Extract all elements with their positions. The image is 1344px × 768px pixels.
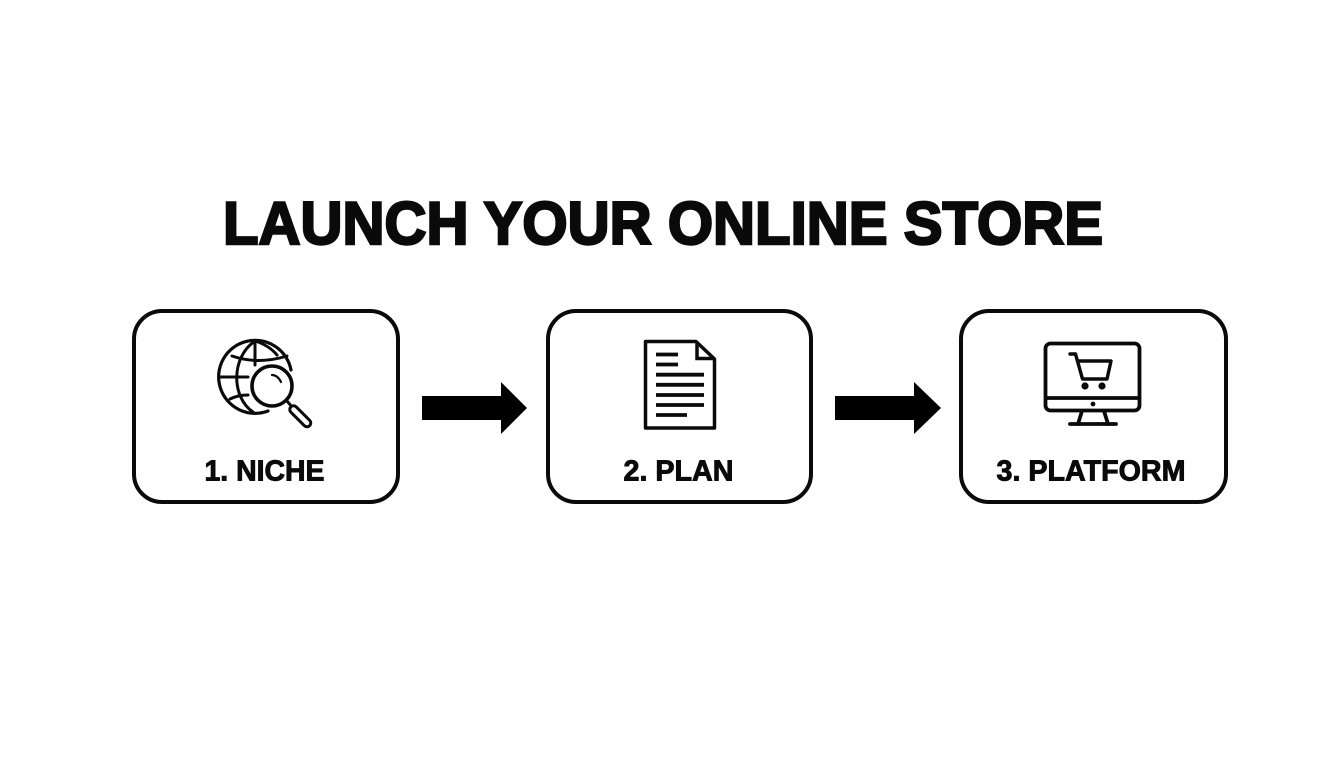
card outline: platform [961,311,1226,502]
card outline: plan [548,311,811,502]
icon: monitor with shopping cart [1046,344,1140,424]
panel: step 3 platform [961,311,1226,502]
label: 2. plan: 2. PLAN [624,456,734,488]
card outline: niche [134,311,398,502]
panel: step 1 niche [134,311,398,502]
icon: document [646,342,714,428]
panel: step 2 plan [548,311,811,502]
label: 3. platform: 3. PLATFORM [996,456,1186,488]
arrow: plan to platform [835,382,941,434]
icon: globe with magnifying glass [219,340,307,423]
label: 1. niche: 1. NICHE [204,456,324,488]
title: LAUNCH YOUR ONLINE STORE [223,190,1103,257]
arrow: niche to plan [422,382,527,434]
